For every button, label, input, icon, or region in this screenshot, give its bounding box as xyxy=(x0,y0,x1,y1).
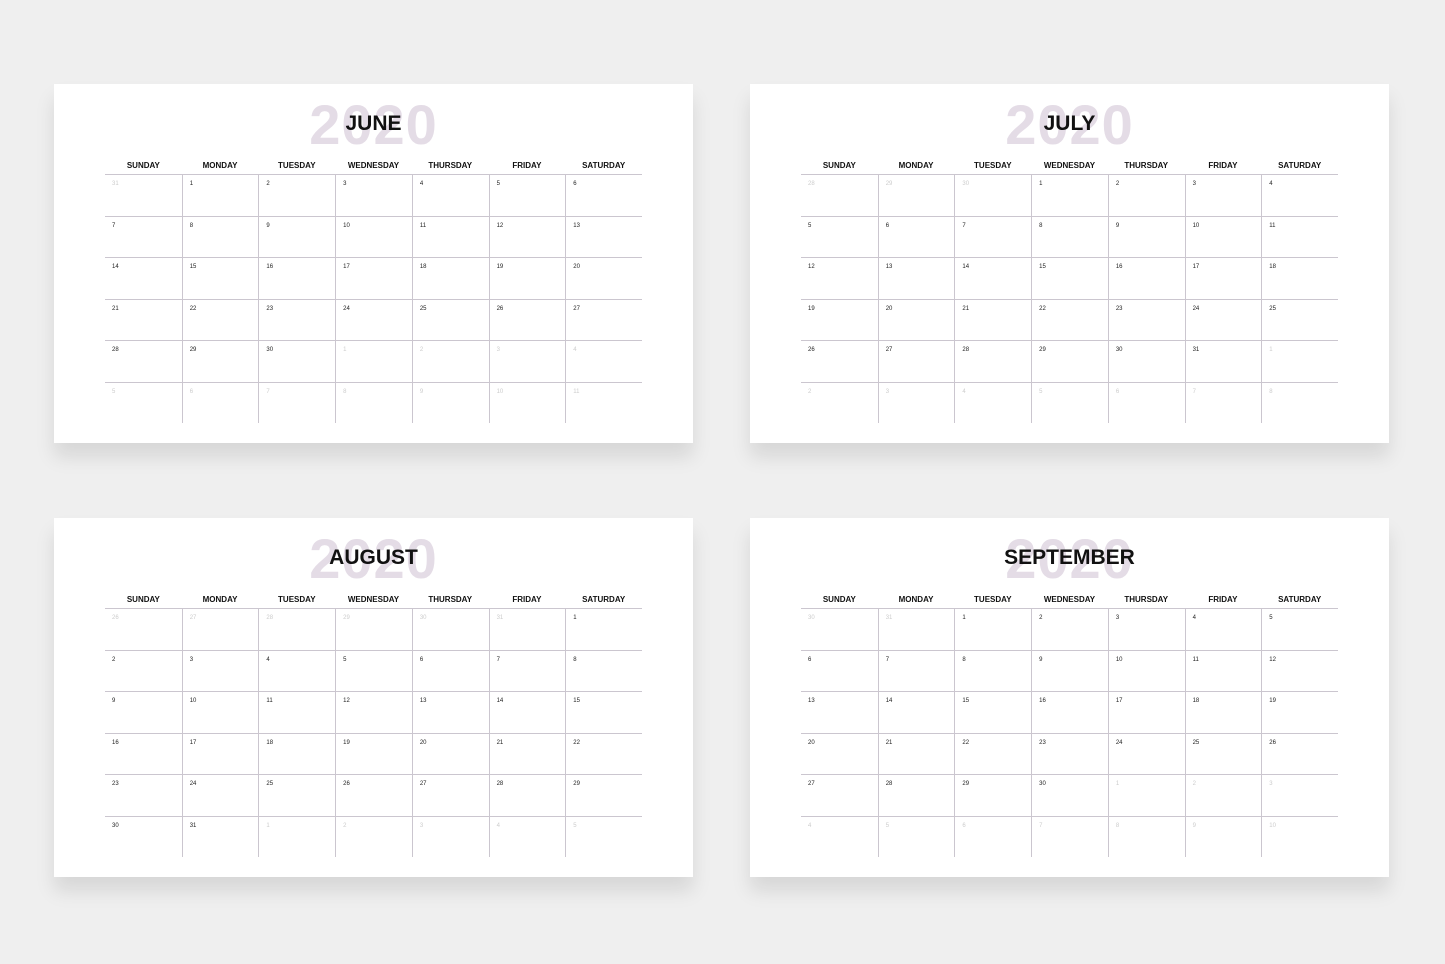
date grid: 12 xyxy=(497,222,503,228)
date grid: 3 xyxy=(886,388,889,394)
date grid: 1 xyxy=(962,615,966,621)
date grid: 13 xyxy=(573,222,580,228)
date grid: 6 xyxy=(420,656,423,662)
date grid: 14 xyxy=(962,264,969,270)
date grid: 7 xyxy=(962,222,966,228)
date grid: 10 xyxy=(190,698,196,704)
date grid: 30 xyxy=(962,181,969,187)
weekday header: SATURDAY xyxy=(1278,161,1321,170)
date grid: 14 xyxy=(497,698,503,704)
date grid: 12 xyxy=(808,264,815,270)
date grid: 2 xyxy=(808,388,811,394)
date grid: 26 xyxy=(112,615,119,621)
date grid: 14 xyxy=(886,698,892,704)
date grid: 10 xyxy=(1116,656,1123,662)
date grid: 20 xyxy=(420,740,427,746)
date grid: 18 xyxy=(1269,264,1276,270)
date grid: 8 xyxy=(190,222,193,228)
date grid: 18 xyxy=(420,264,427,270)
date grid: 22 xyxy=(1039,306,1046,312)
date grid: 3 xyxy=(420,822,423,828)
month title: JUNE xyxy=(345,112,402,135)
date grid: 3 xyxy=(343,181,346,187)
date grid: 11 xyxy=(420,222,426,228)
date grid: 13 xyxy=(420,698,427,704)
date grid: 7 xyxy=(112,222,115,228)
date grid: 3 xyxy=(1116,615,1119,621)
date grid: 2 xyxy=(112,656,115,662)
date grid: 12 xyxy=(343,698,350,704)
date grid: 27 xyxy=(190,615,196,621)
date grid: 6 xyxy=(573,181,577,187)
weekday header xyxy=(823,595,1321,604)
date grid xyxy=(105,174,642,423)
date grid: 1 xyxy=(190,181,193,187)
date grid: 28 xyxy=(112,347,119,353)
date grid: 12 xyxy=(1269,656,1276,662)
date grid: 5 xyxy=(343,656,346,662)
date grid xyxy=(801,174,1338,423)
date grid: 24 xyxy=(1116,740,1123,746)
date grid: 25 xyxy=(266,781,273,787)
date grid: 17 xyxy=(1193,264,1199,270)
weekday header: THURSDAY xyxy=(1124,595,1168,604)
date grid: 3 xyxy=(1269,781,1273,787)
date grid: 29 xyxy=(962,781,969,787)
date grid: 7 xyxy=(266,388,270,394)
date grid: 5 xyxy=(1269,615,1273,621)
date grid: 11 xyxy=(266,698,273,704)
month title: JULY xyxy=(1044,112,1095,135)
date grid: 15 xyxy=(190,264,196,270)
date grid: 31 xyxy=(497,615,503,621)
weekday header: FRIDAY xyxy=(512,161,541,170)
date grid: 11 xyxy=(573,388,580,394)
date grid: 2 xyxy=(1116,181,1119,187)
date grid: 26 xyxy=(343,781,350,787)
date grid: 29 xyxy=(343,615,350,621)
weekday header: THURSDAY xyxy=(1124,161,1168,170)
date grid: 24 xyxy=(190,781,196,787)
date grid: 23 xyxy=(1116,306,1123,312)
date grid: 28 xyxy=(497,781,503,787)
date grid: 4 xyxy=(420,181,423,187)
date grid: 5 xyxy=(1039,388,1042,394)
date grid: 21 xyxy=(886,740,892,746)
date grid: 2 xyxy=(1193,781,1196,787)
date grid: 10 xyxy=(1193,222,1199,228)
date grid: 22 xyxy=(573,740,580,746)
date grid: 5 xyxy=(886,822,889,828)
date grid: 4 xyxy=(1269,181,1273,187)
date grid xyxy=(105,608,642,857)
date grid: 4 xyxy=(573,347,577,353)
date grid: 8 xyxy=(962,656,966,662)
date grid: 16 xyxy=(1039,698,1046,704)
weekday header: THURSDAY xyxy=(428,161,472,170)
date grid: 20 xyxy=(808,740,815,746)
date grid: 4 xyxy=(962,388,966,394)
date grid: 29 xyxy=(1039,347,1046,353)
month title: AUGUST xyxy=(329,546,418,569)
weekday header: SUNDAY xyxy=(127,161,160,170)
date grid: 1 xyxy=(573,615,577,621)
date grid: 15 xyxy=(1039,264,1046,270)
date grid: 3 xyxy=(1193,181,1196,187)
date grid: 17 xyxy=(190,740,196,746)
date grid: 4 xyxy=(497,822,500,828)
weekday header xyxy=(127,161,625,170)
date grid: 9 xyxy=(112,698,115,704)
date grid: 10 xyxy=(497,388,503,394)
date grid: 1 xyxy=(1116,781,1119,787)
date grid: 9 xyxy=(1039,656,1042,662)
date grid: 10 xyxy=(1269,822,1276,828)
date grid: 17 xyxy=(1116,698,1123,704)
weekday header: THURSDAY xyxy=(428,595,472,604)
date grid: 29 xyxy=(886,181,892,187)
date grid: 22 xyxy=(190,306,196,312)
weekday header xyxy=(823,161,1321,170)
date grid: 24 xyxy=(343,306,350,312)
date grid: 29 xyxy=(573,781,580,787)
weekday header: MONDAY xyxy=(203,595,237,604)
date grid: 30 xyxy=(420,615,427,621)
date grid: 8 xyxy=(573,656,577,662)
weekday header: TUESDAY xyxy=(278,595,316,604)
date grid: 26 xyxy=(1269,740,1276,746)
weekday header: FRIDAY xyxy=(1208,595,1237,604)
panel: August calendar xyxy=(54,518,693,877)
date grid: 7 xyxy=(886,656,889,662)
date grid: 28 xyxy=(808,181,815,187)
date grid: 19 xyxy=(808,306,815,312)
date grid: 23 xyxy=(266,306,273,312)
date grid: 21 xyxy=(497,740,503,746)
weekday header: MONDAY xyxy=(899,161,933,170)
date grid: 30 xyxy=(112,822,119,828)
date grid: 30 xyxy=(1116,347,1123,353)
date grid: 20 xyxy=(573,264,580,270)
date grid: 20 xyxy=(886,306,892,312)
date grid: 23 xyxy=(1039,740,1046,746)
date grid: 24 xyxy=(1193,306,1199,312)
date grid: 16 xyxy=(112,740,119,746)
weekday header: SUNDAY xyxy=(127,595,160,604)
date grid: 13 xyxy=(808,698,815,704)
date grid: 2 xyxy=(266,181,270,187)
date grid: 4 xyxy=(266,656,270,662)
weekday header: SATURDAY xyxy=(582,161,625,170)
date grid: 3 xyxy=(497,347,500,353)
date grid: 27 xyxy=(420,781,427,787)
weekday header: MONDAY xyxy=(203,161,237,170)
date grid: 9 xyxy=(266,222,270,228)
year watermark: 2020 xyxy=(1005,527,1134,590)
date grid: 28 xyxy=(962,347,969,353)
date grid: 27 xyxy=(573,306,580,312)
weekday header: FRIDAY xyxy=(1208,161,1237,170)
weekday header xyxy=(127,595,625,604)
date grid: 9 xyxy=(1116,222,1119,228)
date grid: 15 xyxy=(962,698,969,704)
weekday header: SUNDAY xyxy=(823,161,856,170)
date grid: 15 xyxy=(573,698,580,704)
date grid: 11 xyxy=(1269,222,1276,228)
panel: June calendar xyxy=(54,84,693,443)
weekday header: WEDNESDAY xyxy=(1044,595,1095,604)
panel: July calendar xyxy=(750,84,1389,443)
date grid: 31 xyxy=(112,181,119,187)
weekday header: SATURDAY xyxy=(582,595,625,604)
date grid: 21 xyxy=(112,306,119,312)
date grid: 2 xyxy=(420,347,423,353)
weekday header: FRIDAY xyxy=(512,595,541,604)
date grid: 31 xyxy=(1193,347,1199,353)
date grid: 31 xyxy=(886,615,892,621)
weekday header: TUESDAY xyxy=(974,161,1012,170)
date grid: 5 xyxy=(497,181,500,187)
date grid: 1 xyxy=(343,347,346,353)
date grid: 5 xyxy=(808,222,811,228)
date grid: 23 xyxy=(112,781,119,787)
date grid: 2 xyxy=(1039,615,1042,621)
date grid: 3 xyxy=(190,656,193,662)
date grid: 4 xyxy=(808,822,811,828)
date grid: 25 xyxy=(1193,740,1199,746)
date grid: 10 xyxy=(343,222,350,228)
date grid xyxy=(801,608,1338,857)
date grid: 5 xyxy=(573,822,577,828)
date grid: 6 xyxy=(190,388,193,394)
date grid: 30 xyxy=(266,347,273,353)
date grid: 6 xyxy=(962,822,966,828)
date grid: 16 xyxy=(1116,264,1123,270)
date grid: 31 xyxy=(190,822,196,828)
date grid: 18 xyxy=(1193,698,1199,704)
weekday header: MONDAY xyxy=(899,595,933,604)
weekday header: TUESDAY xyxy=(278,161,316,170)
weekday header: SATURDAY xyxy=(1278,595,1321,604)
date grid: 14 xyxy=(112,264,119,270)
date grid: 28 xyxy=(266,615,273,621)
date grid: 8 xyxy=(343,388,346,394)
date grid: 30 xyxy=(808,615,815,621)
date grid: 2 xyxy=(343,822,346,828)
date grid: 1 xyxy=(1269,347,1273,353)
date grid: 30 xyxy=(1039,781,1046,787)
date grid: 25 xyxy=(1269,306,1276,312)
panel: September calendar xyxy=(750,518,1389,877)
date grid: 25 xyxy=(420,306,427,312)
date grid: 19 xyxy=(343,740,350,746)
weekday header: SUNDAY xyxy=(823,595,856,604)
date grid: 13 xyxy=(886,264,892,270)
date grid: 26 xyxy=(808,347,815,353)
date grid: 6 xyxy=(808,656,811,662)
date grid: 9 xyxy=(1193,822,1196,828)
date grid: 8 xyxy=(1269,388,1273,394)
date grid: 7 xyxy=(497,656,500,662)
date grid: 19 xyxy=(497,264,503,270)
year watermark: 2020 xyxy=(1005,93,1134,156)
date grid: 26 xyxy=(497,306,503,312)
date grid: 7 xyxy=(1039,822,1042,828)
weekday header: WEDNESDAY xyxy=(348,161,399,170)
date grid: 16 xyxy=(266,264,273,270)
date grid: 1 xyxy=(1039,181,1042,187)
year watermark: 2020 xyxy=(309,527,438,590)
date grid: 8 xyxy=(1116,822,1119,828)
weekday header: WEDNESDAY xyxy=(348,595,399,604)
date grid: 6 xyxy=(1116,388,1119,394)
date grid: 7 xyxy=(1193,388,1196,394)
month title: SEPTEMBER xyxy=(1004,546,1135,569)
date grid: 19 xyxy=(1269,698,1276,704)
date grid: 29 xyxy=(190,347,196,353)
date grid: 1 xyxy=(266,822,270,828)
date grid: 22 xyxy=(962,740,969,746)
weekday header: WEDNESDAY xyxy=(1044,161,1095,170)
date grid: 5 xyxy=(112,388,115,394)
date grid: 4 xyxy=(1193,615,1196,621)
date grid: 28 xyxy=(886,781,892,787)
date grid: 6 xyxy=(886,222,889,228)
year watermark: 2020 xyxy=(309,93,438,156)
date grid: 11 xyxy=(1193,656,1199,662)
date grid: 18 xyxy=(266,740,273,746)
date grid: 8 xyxy=(1039,222,1042,228)
date grid: 27 xyxy=(808,781,815,787)
date grid: 27 xyxy=(886,347,892,353)
date grid: 17 xyxy=(343,264,350,270)
weekday header: TUESDAY xyxy=(974,595,1012,604)
date grid: 21 xyxy=(962,306,969,312)
date grid: 9 xyxy=(420,388,423,394)
